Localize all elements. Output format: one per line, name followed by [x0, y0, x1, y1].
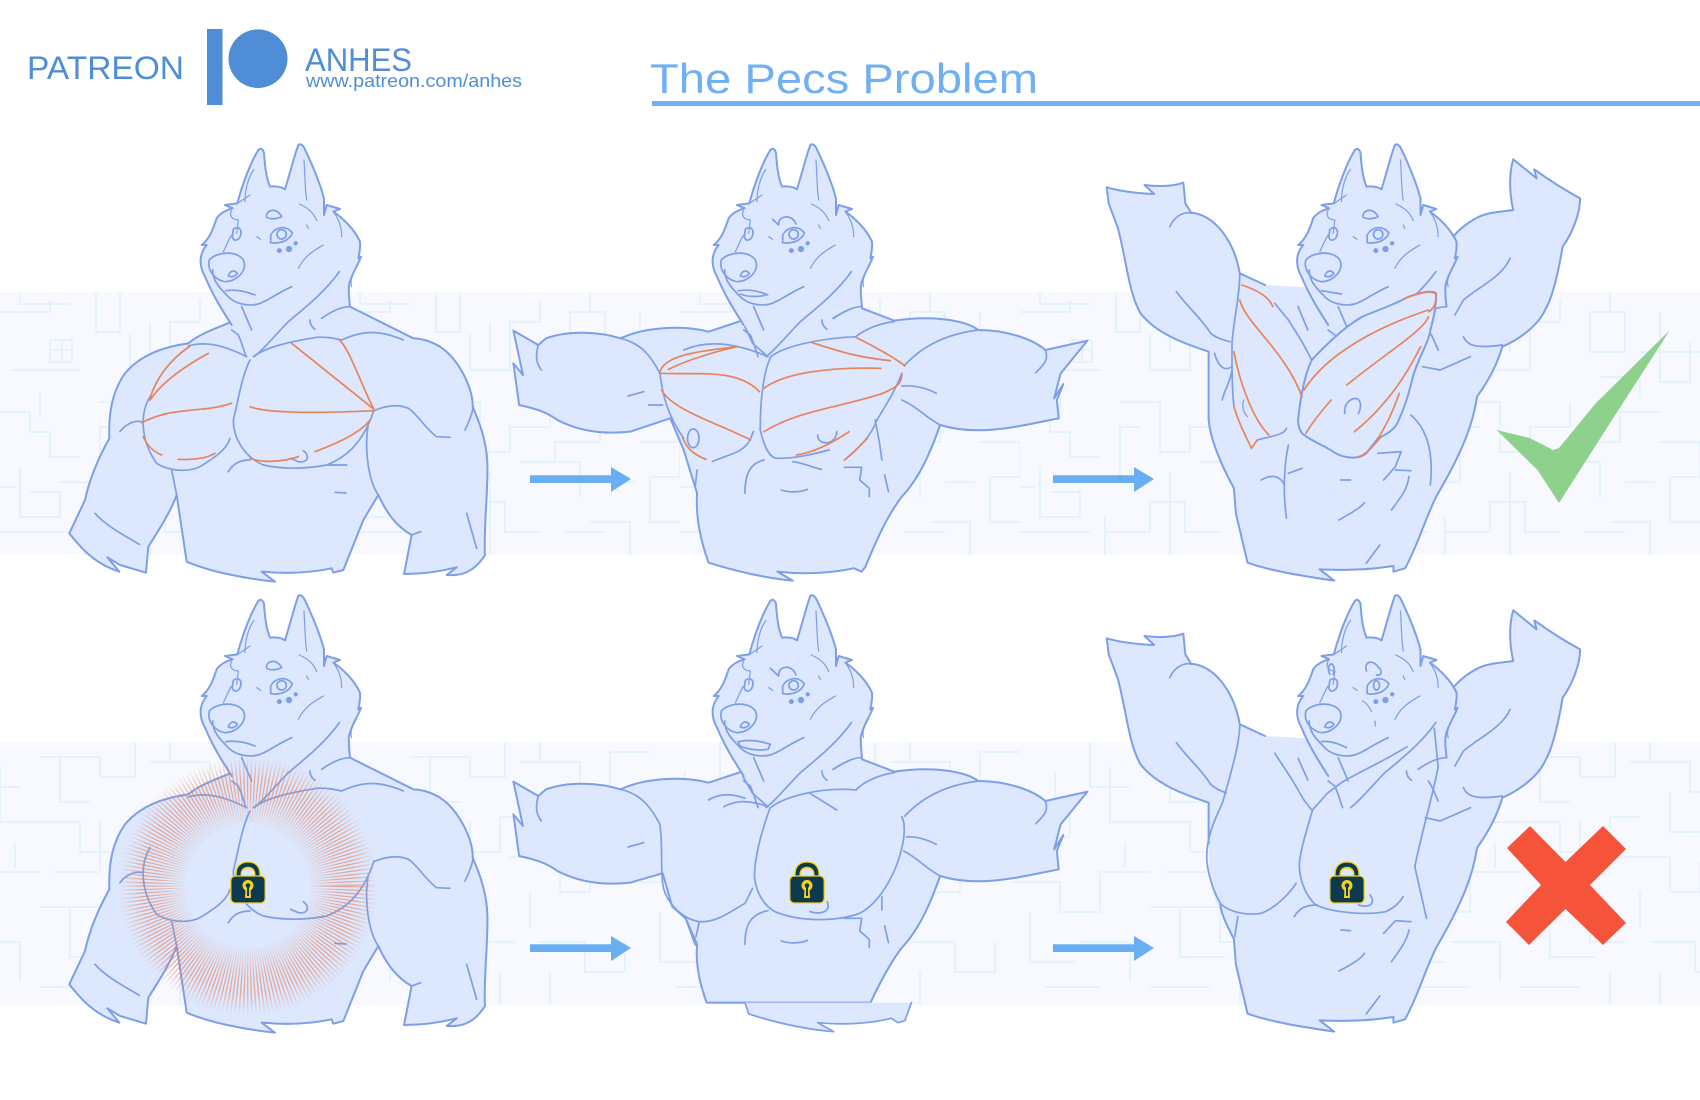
- figure: bottom right, arms raised with locked pec: [1107, 595, 1580, 1032]
- arrow: top row first: [530, 467, 631, 492]
- head: [201, 595, 361, 808]
- check mark: [1497, 330, 1670, 503]
- head: [713, 144, 873, 357]
- head: [1297, 144, 1457, 357]
- lock icon: [790, 862, 824, 903]
- pec fibres: [660, 337, 905, 460]
- logo mark: [207, 29, 288, 105]
- logo wordmark: PATREON: [27, 50, 184, 86]
- logo: Patreon Anhes: [27, 29, 522, 105]
- figure: top right, arms raised with pec fibres: [1107, 144, 1580, 581]
- cross mark: [1506, 826, 1626, 945]
- lock icon: [1330, 862, 1364, 903]
- neck tuft: [1275, 303, 1312, 360]
- creator url: www.patreon.com/anhes: [305, 71, 522, 91]
- lock icon: [231, 862, 265, 903]
- figure: top left, arms down with pec fibres: [69, 144, 487, 582]
- arrow: bottom row second: [1053, 936, 1154, 961]
- raised pec: [1298, 292, 1436, 458]
- head: [1297, 595, 1457, 808]
- arrow: top row second: [1053, 467, 1154, 492]
- locked pec outlines: [1207, 725, 1438, 1014]
- background band: bottom row: [0, 742, 1700, 1005]
- figure: top middle, arms out with pec fibres: [513, 144, 1087, 581]
- title underline: [652, 101, 1700, 106]
- displaced lower torso: [745, 1003, 911, 1032]
- pain sunburst: [152, 790, 344, 982]
- head: [713, 595, 873, 808]
- figure: bottom left, pec radiating pain: [69, 595, 487, 1033]
- pec fibres: [142, 341, 374, 461]
- creator name: ANHES: [305, 42, 412, 78]
- title: The Pecs Problem: [650, 55, 1038, 102]
- figure: bottom middle, arms out with locked pec: [513, 595, 1087, 1032]
- arrow: bottom row first: [530, 936, 631, 961]
- head: [201, 144, 361, 357]
- background band: top row: [0, 292, 1700, 555]
- pec fibres: [1234, 285, 1436, 457]
